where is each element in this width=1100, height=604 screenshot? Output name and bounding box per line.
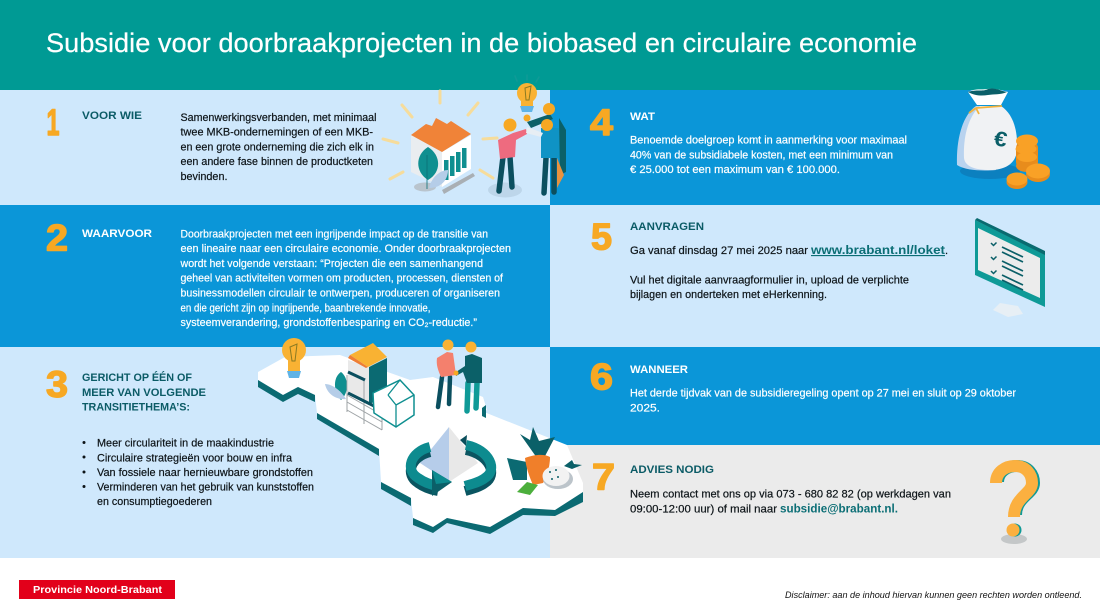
number 6: 6	[590, 356, 613, 398]
bullet list	[82, 438, 314, 508]
bullet list: Meer circulariteit in de maakindustrie	[97, 438, 274, 450]
bullet list: Van fossiele naar hernieuwbare grondstoffen	[97, 467, 313, 479]
text block: voor wie: en een grote onderneming die zich elk in	[180, 141, 374, 153]
number 3: 3	[46, 364, 68, 405]
text block: voor wie: een andere fase binnen de productketen	[180, 156, 373, 168]
heading: voor wie: VOOR WIE	[82, 110, 142, 122]
panel 7: advies nodig	[550, 445, 1100, 558]
text block: waarvoor: wordt het volgende verstaan: “Projecten die een samenhangend	[180, 258, 483, 270]
panel 4: wat	[550, 90, 1100, 205]
text block: waarvoor	[180, 228, 511, 329]
text block: voor wie: twee MKB-ondernemingen of een MKB-	[180, 127, 373, 139]
panel 1: voor wie	[0, 90, 550, 205]
text block: voor wie	[180, 112, 376, 183]
text block: aanvragen: .	[945, 245, 948, 257]
icon: lightbulb	[282, 338, 306, 378]
text block: aanvragen: Vul het digitale aanvraagformulier in, upload de verplichte	[630, 274, 909, 286]
coins	[1006, 142, 1050, 189]
text block: aanvragen: bijlagen en onderteken met eHerkenning.	[630, 289, 827, 301]
number 5: 5	[591, 216, 612, 258]
text block: wanneer: Het derde tijdvak van de subsidieregeling opent op 27 mei en sluit op 29 oktober	[630, 388, 1016, 400]
disclaimer: Disclaimer: aan de inhoud hiervan kunnen geen rechten worden ontleend.	[785, 590, 1082, 601]
icon: money bag with coins	[957, 88, 1050, 189]
text block: waarvoor: en die gericht zijn op ingrijpende, baanbrekende innovatie,	[180, 302, 430, 314]
icon: vegetables	[507, 427, 582, 495]
text block: voor wie: Samenwerkingsverbanden, met minimaal	[180, 112, 376, 124]
text block: waarvoor: systeemverandering, grondstoffenbesparing en CO₂-reductie.”	[180, 317, 477, 329]
panel 2: waarvoor	[0, 205, 550, 347]
number 4: 4	[590, 102, 613, 143]
bullet list: Verminderen van het gebruik van kunststoffen	[97, 482, 314, 494]
logo: provincie noord-brabant	[19, 580, 175, 599]
icon: factory	[411, 118, 475, 194]
text block: advies: 09:00-12:00 uur) of mail naar	[630, 503, 777, 515]
panel 6: wanneer	[550, 347, 1100, 445]
text block: wanneer	[630, 388, 1016, 414]
icon: computer monitor with checklist	[975, 218, 1045, 317]
text block: wanneer: 2025.	[630, 402, 660, 414]
heading: wat: WAT	[630, 111, 655, 123]
text block: wat	[630, 135, 907, 176]
heading: aanvragen: AANVRAGEN	[630, 221, 704, 233]
text block: wat: 40% van de subsidiabele kosten, met een minimum van	[630, 149, 893, 161]
text block: aanvragen: Ga vanaf dinsdag 27 mei 2025 naar	[630, 245, 808, 257]
text block: wat: Benoemde doelgroep komt in aanmerking voor maximaal	[630, 135, 907, 147]
icon: building under construction	[325, 343, 414, 430]
number 2: 2	[46, 218, 68, 258]
text block: waarvoor: Doorbraakprojecten met een ingrijpende impact op de transitie van	[180, 228, 488, 240]
illustration: factory and people with lightbulb	[383, 75, 566, 198]
bullet list: Circulaire strategieën voor bouw en infra	[97, 452, 293, 464]
text block: advies	[630, 489, 951, 515]
bullet list: en consumptiegoederen	[97, 496, 212, 508]
heading: gericht op	[82, 371, 206, 414]
icon: recycling arrows around pyramid	[411, 427, 491, 496]
icon: question mark	[996, 466, 1034, 544]
heading: gericht op: GERICHT OP ÉÉN OF	[82, 371, 192, 384]
euro sign: €	[992, 127, 1009, 152]
panel 5: aanvragen	[550, 205, 1100, 347]
text block: waarvoor: een lineaire naar een circulaire economie. Onder doorbraakprojecten	[180, 243, 511, 255]
icon: lightbulb	[515, 75, 539, 112]
number 7: 7	[592, 456, 615, 498]
text block: advies: subsidie@brabant.nl.	[780, 503, 898, 515]
header banner	[0, 0, 1100, 90]
heading: gericht op: TRANSITIETHEMA’S:	[82, 402, 190, 414]
text block: voor wie: bevinden.	[180, 171, 228, 183]
text block: wat: € 25.000 tot een maximum van € 100.000.	[630, 164, 840, 176]
text block: advies: Neem contact met ons op via 073 - 680 82 82 (op werkdagen van	[630, 489, 951, 501]
title: Subsidie voor doorbraakprojecten in de biobased en circulaire economie	[46, 28, 917, 58]
heading: waarvoor: WAARVOOR	[82, 228, 152, 240]
text block: waarvoor: geheel van activiteiten vormen om producten, processen, diensten of	[180, 273, 504, 285]
icon: two people shaking hands	[437, 340, 482, 411]
text block: aanvragen: www.brabant.nl/loket	[810, 245, 945, 257]
text block: aanvragen	[630, 245, 948, 301]
icon: person right	[526, 103, 566, 193]
text block: waarvoor: businessmodellen circulair te ontwerpen, produceren of organiseren	[180, 288, 500, 300]
heading: wanneer: WANNEER	[630, 364, 688, 376]
platform base	[258, 355, 583, 527]
number 1: 1	[46, 102, 60, 143]
platform edges	[258, 380, 583, 534]
logo: provincie noord-brabant: Provincie Noord-Brabant	[33, 585, 163, 596]
illustration: circular economy platform	[258, 338, 583, 534]
panel 3: thema's	[0, 347, 550, 558]
heading: advies nodig: ADVIES NODIG	[630, 464, 714, 476]
icon: person left	[488, 114, 530, 198]
heading: gericht op: MEER VAN VOLGENDE	[82, 387, 206, 399]
